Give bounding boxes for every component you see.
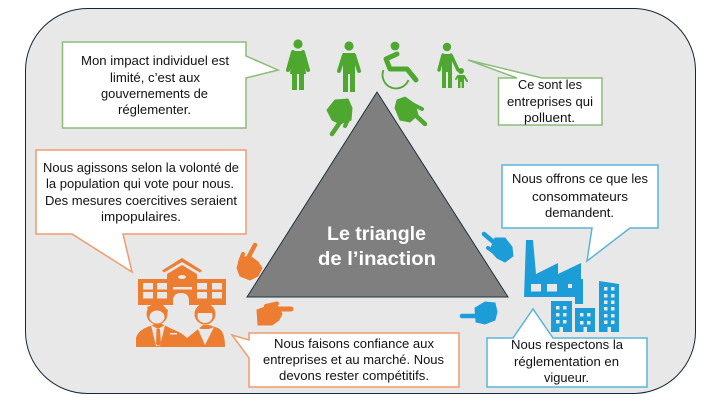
callout: companies follow regulation: vigueur. [544, 370, 589, 385]
icon: green hand left [327, 99, 352, 134]
triangle title [318, 224, 436, 270]
callout: companies follow regulation [487, 309, 647, 387]
triangle title: de l’inaction [318, 249, 436, 270]
central triangle [247, 92, 508, 297]
triangle title: Le triangle [327, 224, 426, 245]
callout: government market trust [232, 333, 459, 387]
callout: citizens individual impact: réglementer. [118, 102, 191, 117]
callout: companies consumer demand: consommateurs [532, 189, 629, 204]
icon: orange hand right [257, 304, 291, 325]
callout: companies follow regulation: Nous respectons la [511, 337, 624, 352]
icon: adult and child [439, 43, 467, 88]
callout: government voters: la population qui vote pour nous. [46, 176, 234, 191]
icon: blue factory and city buildings [524, 240, 619, 332]
callout: companies follow regulation: réglementation en [514, 354, 619, 369]
callout: citizens individual impact [62, 42, 278, 128]
callout: companies consumer demand: demandent. [545, 205, 614, 220]
callout: companies pollute [468, 60, 602, 125]
callout: companies pollute: Ce sont les [518, 77, 582, 92]
icon: wheelchair user [383, 42, 416, 88]
icon: blue hand pointing up-left [484, 234, 513, 262]
callout: government market trust: Nous faisons confiance aux [274, 336, 435, 351]
icon: green hand right [395, 97, 425, 124]
callout: government market trust: entreprises et au marché. Nous [263, 352, 444, 367]
icon: man [339, 41, 359, 92]
callout: government voters: Nous agissons selon la volonté de [43, 160, 239, 175]
callout: companies pollute: entreprises qui [507, 94, 593, 109]
callout: companies consumer demand [502, 165, 658, 261]
callout: citizens individual impact: Mon impact individuel est [81, 53, 229, 68]
callout: government voters: impopulaires. [101, 209, 181, 224]
callout: citizens individual impact: limité, c’est aux [110, 70, 200, 85]
icon: blue hand pointing left [462, 302, 497, 324]
callout: government voters: Des mesures coercitives seraient [45, 193, 237, 208]
callout: companies consumer demand: Nous offrons ce que les [512, 171, 648, 186]
callout: citizens individual impact: gouvernements de [101, 86, 208, 101]
icon: orange government building with officials [136, 258, 226, 347]
icon: orange hand up [237, 245, 262, 280]
callout: government market trust: devons rester compétitifs. [279, 368, 429, 383]
icon: woman [288, 39, 308, 90]
callout: government voters [36, 150, 246, 272]
callout: companies pollute: polluent. [524, 110, 575, 125]
